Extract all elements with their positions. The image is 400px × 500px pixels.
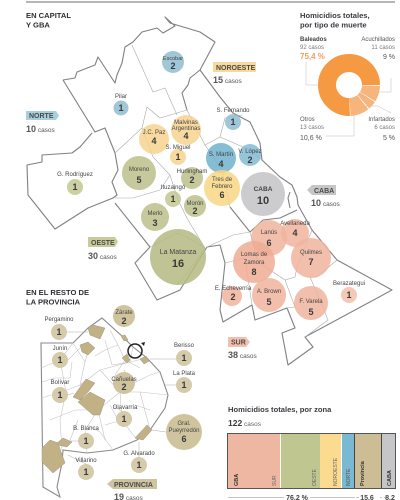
- bubble group: sur: Zamora: [244, 260, 265, 266]
- zone label: CABA: 10 casos: [311, 198, 341, 208]
- donut labels: Infartados: [368, 117, 395, 123]
- bubble group: oeste: Morón: [186, 201, 204, 207]
- bubble group: oeste: 16: [172, 258, 184, 270]
- bubble: CABA: [241, 172, 285, 216]
- bubble group: sur: 4: [292, 228, 298, 238]
- bubble group: noroeste: [139, 115, 240, 206]
- stacked bar chart: [228, 434, 396, 488]
- bubble group: oeste: 1: [170, 194, 176, 204]
- bubble group: noroeste: Malvinas: [174, 120, 198, 126]
- bubble group: noroeste: 4: [183, 131, 189, 141]
- bubble group: oeste: Ituzaingó: [161, 185, 186, 191]
- stacked bar chart: NOROESTE: [333, 457, 339, 486]
- bubble group: provincia: Bolívar: [51, 380, 69, 386]
- stacked bar chart: NORTE: [346, 468, 352, 486]
- bubble group: provincia: 1: [121, 414, 127, 424]
- bubble group: provincia: Pergamino: [44, 317, 74, 323]
- heading: por zona: [228, 405, 332, 428]
- bubble group: oeste: 1: [72, 182, 78, 192]
- bubble group: oeste: La Matanza: [160, 249, 196, 256]
- bubble group: provincia: Berisso: [174, 343, 195, 349]
- bubble group: oeste: 3: [152, 218, 158, 228]
- bubble group: noroeste: 4: [151, 136, 157, 146]
- bubble group: sur: F. Varela: [299, 299, 323, 305]
- locator ring: [128, 342, 145, 358]
- bubble: CABA: CABA: [254, 186, 273, 193]
- bubble group: oeste: 5: [136, 175, 142, 185]
- bubble group: sur: Berazategui: [333, 281, 365, 287]
- zone label: oeste: 30 casos: [88, 251, 118, 261]
- bubble group: provincia: 1: [57, 355, 63, 365]
- bubble group: provincia: Villarino: [75, 458, 97, 464]
- donut labels: [300, 37, 395, 142]
- bubble group: sur: Quilmes: [300, 250, 322, 256]
- bubble group: sur: 2: [230, 292, 236, 302]
- heading: tipo de muerte: Homicidios totales,: [300, 11, 370, 20]
- stacked bar chart: CABA: [387, 470, 393, 486]
- bubble group: provincia: Cañuelas: [111, 377, 137, 383]
- bubble group: oeste: Hurlingham: [177, 169, 207, 175]
- zone label: norte: 10 casos: [26, 124, 56, 134]
- stacked bar chart: SUR: [272, 475, 278, 486]
- donut labels: 10,6 %: [300, 135, 322, 142]
- bubble group: sur: Avellaneda: [280, 221, 310, 227]
- map: GBA zones outline: [27, 17, 392, 365]
- bubble group: norte: Escobar: [163, 56, 183, 62]
- zone label: norte: NORTE: [29, 113, 54, 120]
- stacked bar chart: GBA: [234, 474, 240, 486]
- bubble group: oeste: 2: [192, 206, 198, 216]
- bubble group: provincia: [44, 305, 202, 480]
- bubble group: sur: 8: [251, 267, 257, 277]
- bubble group: sur: [215, 219, 365, 320]
- bubble group: norte: S. Fernando: [216, 108, 250, 114]
- bubble group: provincia: 1: [83, 467, 89, 477]
- bubble group: norte: V. López: [238, 149, 262, 155]
- zone label: CABA: CABA: [314, 188, 334, 195]
- provincial tan districts: [42, 325, 152, 473]
- donut labels: 9 %: [383, 54, 395, 61]
- donut labels: Acuchillados: [361, 37, 395, 43]
- bubble group: sur: 5: [266, 297, 272, 307]
- bubble group: oeste: G. Rodríguez: [57, 172, 93, 178]
- bar chart totals: [228, 495, 395, 500]
- zone label: oeste: [88, 237, 118, 261]
- donut labels: Otros: [300, 117, 315, 123]
- bubble group: provincia: B. Blanca: [73, 426, 100, 432]
- zone label: oeste: OESTE: [91, 240, 115, 247]
- donut chart: [306, 62, 391, 136]
- bubble group: provincia: 1: [181, 353, 187, 363]
- bubble group: provincia: 2: [121, 316, 127, 326]
- donut labels: 5 %: [383, 135, 395, 142]
- bubble group: provincia: 1: [181, 380, 187, 390]
- bubble group: sur: 5: [308, 307, 314, 317]
- bubble group: sur: 6: [266, 238, 272, 248]
- stacked bar chart: Provincia: [360, 460, 366, 486]
- donut labels: Baleados: [300, 37, 327, 43]
- bubble group: oeste: [57, 156, 207, 285]
- bubble group: noroeste: Argentinas: [172, 126, 200, 132]
- zone label: CABA: [307, 185, 341, 208]
- bubble group: provincia: 6: [181, 434, 187, 444]
- bubble group: provincia: 1: [83, 436, 89, 446]
- zone label: norte: [26, 111, 59, 134]
- bubble group: provincia: Zárate: [115, 310, 133, 316]
- zone label: provincia: PROVINCIA: [114, 482, 153, 489]
- bubble group: provincia: 1: [57, 390, 63, 400]
- zone label: noroeste: 15 casos: [213, 75, 243, 85]
- bubble group: sur: A. Brown: [257, 289, 281, 295]
- bubble group: norte: [114, 51, 262, 173]
- bubble group: oeste: 2: [189, 175, 195, 185]
- zone label: noroeste: [213, 62, 256, 85]
- donut labels: 75,4 %: [300, 52, 325, 61]
- bubble group: provincia: Junín: [53, 346, 67, 352]
- donut labels: 13 casos: [300, 125, 324, 131]
- stacked bar chart: OESTE: [312, 468, 318, 486]
- bubble group: norte: 2: [170, 61, 176, 71]
- bubble group: norte: 2: [247, 155, 253, 165]
- bubble group: sur: 1: [346, 290, 352, 300]
- bubble group: provincia: 1: [56, 327, 62, 337]
- bubble group: sur: 7: [308, 257, 314, 267]
- bubble group: oeste: Moreno: [129, 167, 150, 173]
- bubble group: norte: Pilar: [115, 94, 127, 100]
- bubble group: sur: Lanús: [261, 230, 277, 236]
- bubble group: sur: Lomas de: [241, 252, 268, 258]
- donut labels: 6 casos: [374, 125, 395, 131]
- heading: por zona: Homicidios totales, por zona: [228, 405, 332, 414]
- bubble group: norte: S. Martín: [209, 152, 233, 158]
- bubble group: noroeste: S. Miguel: [165, 145, 191, 151]
- bubble group: norte: 1: [230, 117, 236, 127]
- bubble group: sur: E. Echeverría: [215, 286, 252, 292]
- bubble group: norte: 1: [118, 103, 124, 113]
- bubble group: provincia: Gral.: [177, 421, 191, 427]
- bubble group: provincia: 2: [121, 382, 127, 392]
- zone label: sur: SUR: [231, 340, 246, 346]
- bubble group: noroeste: J.C. Paz: [143, 130, 165, 136]
- bubble: CABA: 10: [257, 195, 269, 207]
- zone label: sur: 38 casos: [228, 350, 258, 360]
- donut labels: 11 casos: [371, 45, 395, 51]
- zone label: noroeste: NOROESTE: [216, 65, 256, 72]
- map: provincia de Buenos Aires: [41, 318, 168, 497]
- bubble group: provincia: 1: [136, 460, 142, 470]
- bubble group: provincia: Pueyrredón: [168, 428, 200, 434]
- heading: en capital y GBA: EN CAPITAL: [26, 11, 71, 20]
- bubble group: noroeste: 6: [219, 190, 225, 200]
- zone label: provincia: [107, 479, 157, 500]
- heading: en capital y GBA: Y GBA: [26, 20, 50, 30]
- heading: resto de la provincia: EN EL RESTO DE: [26, 288, 89, 297]
- bubble group: norte: 4: [218, 159, 224, 169]
- bubble group: noroeste: 1: [175, 152, 181, 162]
- bubble group: oeste: Merlo: [147, 211, 163, 217]
- heading: tipo de muerte: por tipo de muerte: [300, 20, 367, 30]
- bubble group: noroeste: Tres de: [212, 177, 233, 183]
- bubble group: provincia: G. Alvarado: [123, 451, 155, 457]
- bubble group: provincia: La Plata: [173, 371, 196, 377]
- donut labels: 92 casos: [300, 45, 324, 51]
- zone label: sur: [228, 337, 258, 360]
- bubble group: noroeste: Febrero: [211, 184, 233, 190]
- heading: por zona: 122 casos: [228, 418, 262, 428]
- bubble group: provincia: Olavarría: [113, 405, 138, 411]
- heading: resto de la provincia: LA PROVINCIA: [26, 298, 81, 306]
